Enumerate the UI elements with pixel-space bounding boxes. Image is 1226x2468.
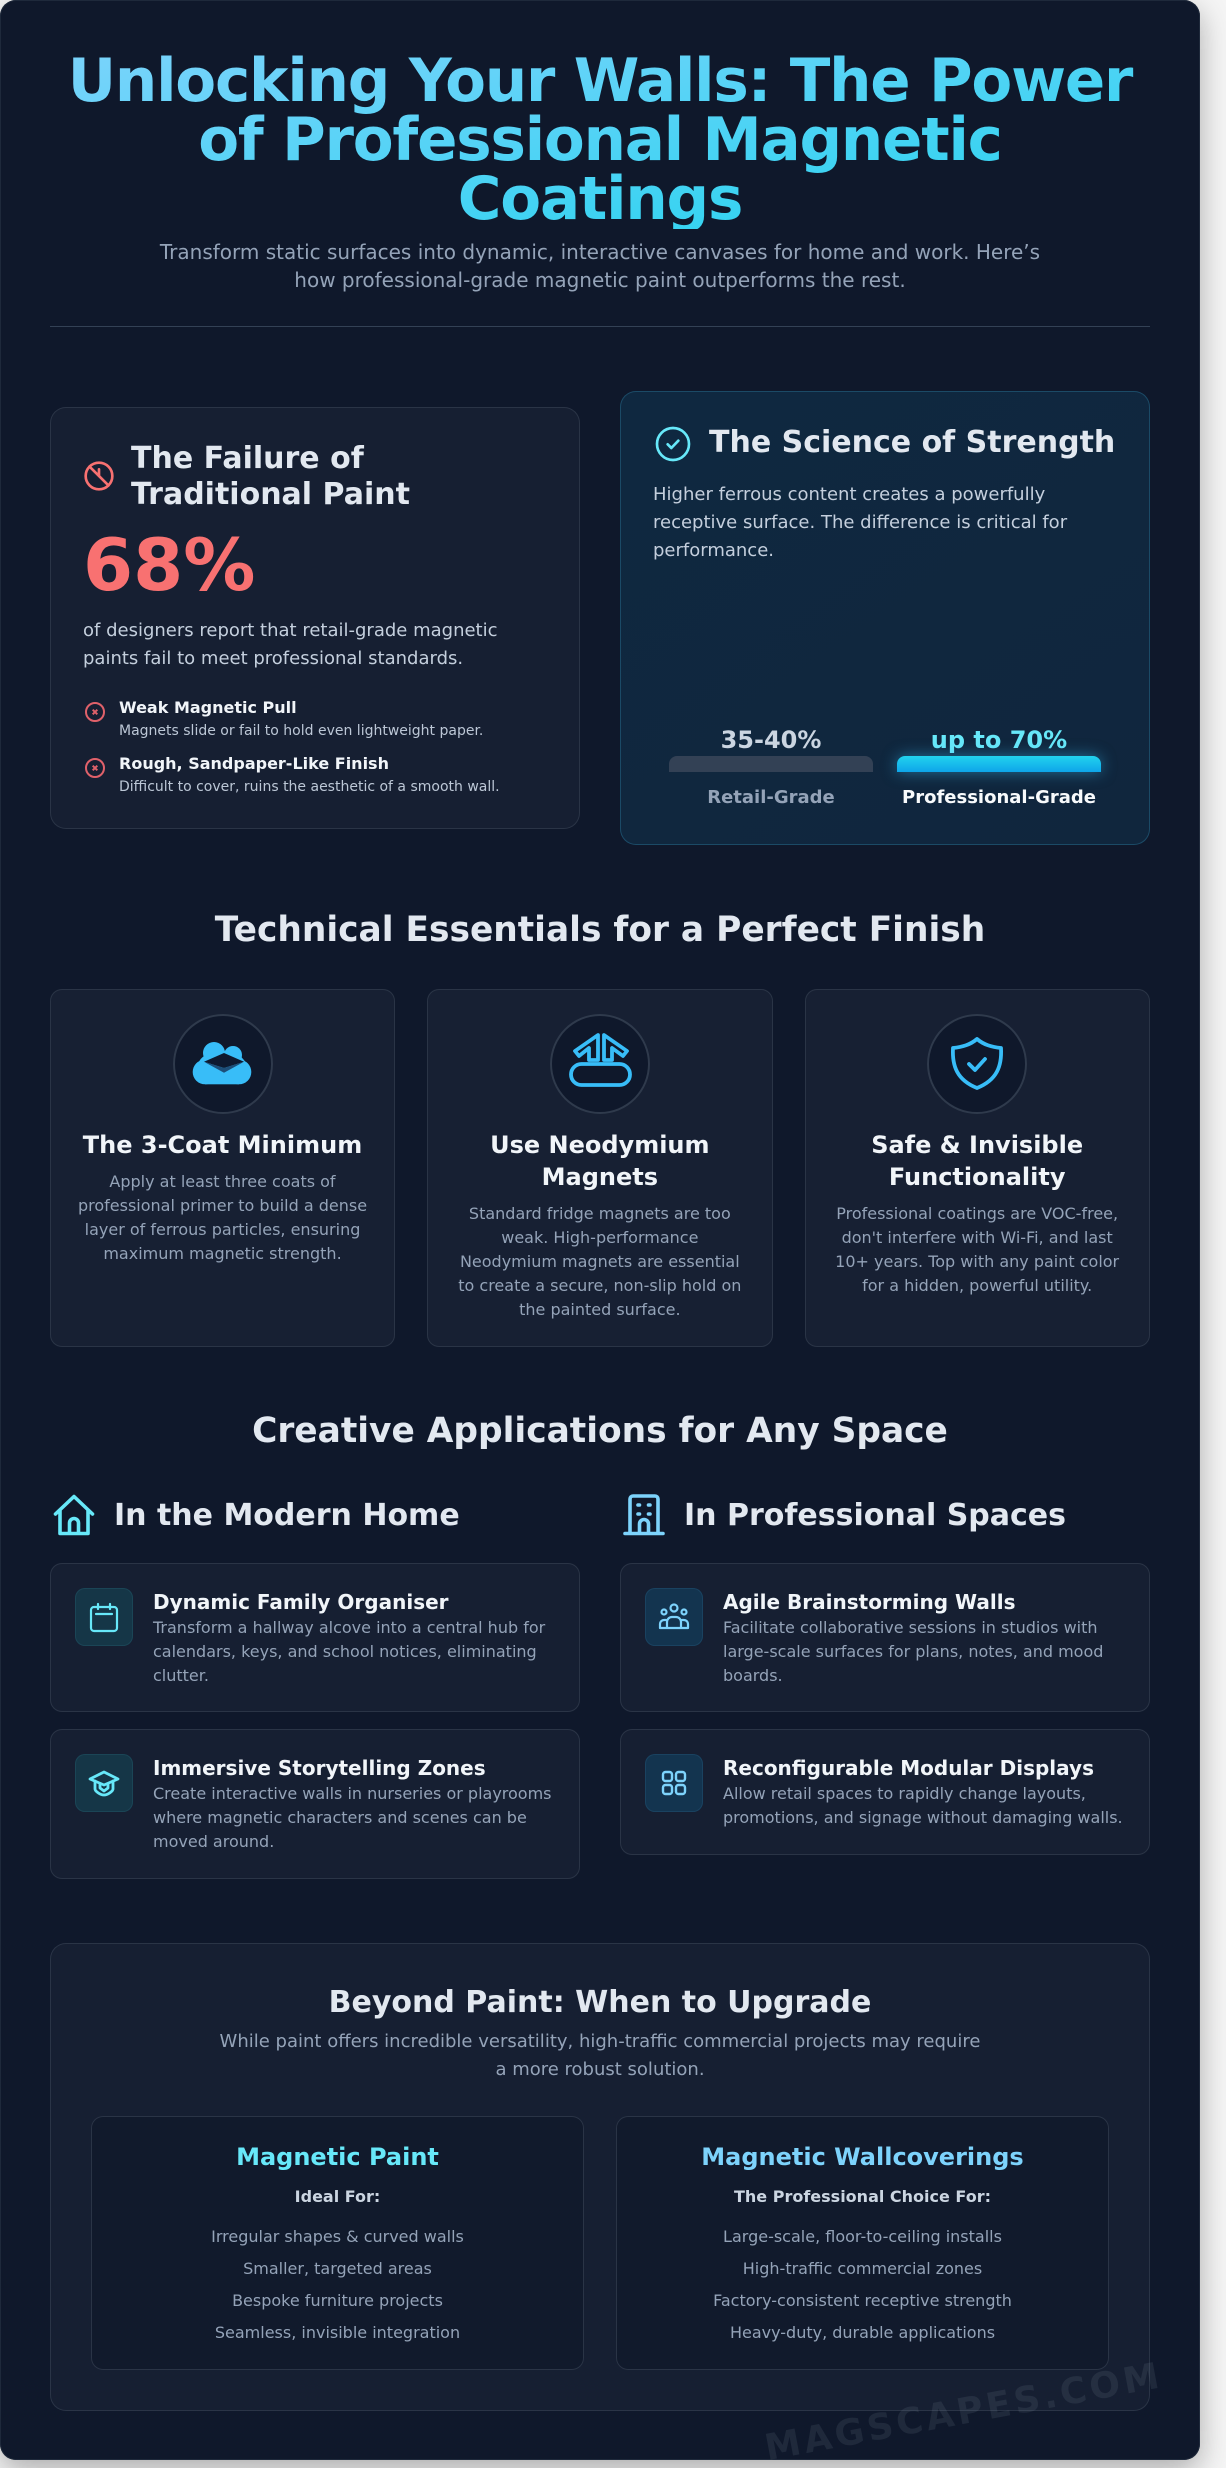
list: High-traffic commercial zones <box>743 2258 982 2278</box>
heading: Traditional Paint <box>131 477 410 512</box>
card title: The 3-Coat Minimum <box>83 1131 362 1159</box>
label: Professional-Grade <box>902 787 1096 808</box>
list: Heavy-duty, durable applications <box>730 2322 995 2342</box>
label: Retail-Grade <box>707 787 835 808</box>
panel: the science of strength <box>620 391 1150 845</box>
text: Create interactive walls in nurseries or playrooms <box>153 1784 552 1802</box>
list item: weak pull <box>85 698 483 739</box>
text: clutter. <box>153 1666 209 1684</box>
bar: professional-grade <box>889 726 1109 808</box>
big stat: 68% <box>83 523 255 607</box>
text: moved around. <box>153 1832 274 1850</box>
text: where magnetic characters and scenes can be <box>153 1808 527 1826</box>
bar <box>897 756 1101 772</box>
comparison: magnetic paint <box>91 2116 584 2370</box>
list: Irregular shapes & curved walls <box>211 2226 464 2246</box>
text: boards. <box>723 1666 783 1684</box>
icon: layered cloud <box>173 1014 273 1114</box>
item title: Rough, Sandpaper-Like Finish <box>119 754 389 773</box>
icon: building <box>623 1494 665 1536</box>
subtitle: Ideal For: <box>295 2186 380 2206</box>
icon: x circle <box>85 758 105 778</box>
title: Reconfigurable Modular Displays <box>723 1756 1094 1780</box>
icon: grid <box>645 1754 703 1812</box>
heading <box>131 441 410 512</box>
title: Coatings <box>458 164 742 234</box>
icon: house <box>54 1494 94 1536</box>
subtitle: The Professional Choice For: <box>734 2186 991 2206</box>
panel: neodymium magnets <box>427 989 773 1347</box>
icon: people <box>645 1588 703 1646</box>
list item: rough finish <box>85 754 500 795</box>
bar chart <box>669 726 1109 808</box>
panel: safe and invisible <box>805 989 1150 1347</box>
card text: Apply at least three coats of <box>109 1172 336 1190</box>
stat description: paints fail to meet professional standards. <box>83 648 463 668</box>
list: Seamless, invisible integration <box>215 2322 460 2342</box>
card text: professional primer to build a dense <box>78 1196 367 1214</box>
icon: x circle <box>85 702 105 722</box>
card text <box>458 1204 741 1318</box>
subtitle: Transform static surfaces into dynamic, interactive canvases for home and work. Here’s <box>160 240 1040 264</box>
body text: performance. <box>653 540 774 561</box>
card title: Use Neodymium <box>490 1131 710 1159</box>
bar: retail-grade <box>669 726 873 808</box>
title: Dynamic Family Organiser <box>153 1590 449 1614</box>
text <box>723 1618 1103 1684</box>
card text: 10+ years. Top with any paint color <box>835 1252 1119 1270</box>
list <box>211 2226 464 2342</box>
intro text: While paint offers incredible versatility, high-traffic commercial projects may require <box>220 2031 980 2052</box>
body text: Higher ferrous content creates a powerfully <box>653 484 1045 505</box>
card text: maximum magnetic strength. <box>103 1244 342 1262</box>
list: Bespoke furniture projects <box>232 2290 443 2310</box>
card: storytelling zones <box>50 1729 580 1879</box>
text: Allow retail spaces to rapidly change layouts, <box>723 1784 1086 1802</box>
item text: Difficult to cover, ruins the aesthetic of a smooth wall. <box>119 779 500 795</box>
heading: technical essentials: Technical Essentials for a Perfect Finish <box>215 910 985 950</box>
list: Factory-consistent receptive strength <box>713 2290 1012 2310</box>
bar <box>669 756 873 772</box>
icon: calendar <box>75 1588 133 1646</box>
icon: banned magnet <box>84 461 114 491</box>
title: Agile Brainstorming Walls <box>723 1590 1015 1614</box>
text: Facilitate collaborative sessions in studios with <box>723 1618 1098 1636</box>
body text <box>653 484 1068 561</box>
card: family organiser <box>50 1563 580 1712</box>
card title: Functionality <box>889 1163 1065 1191</box>
heading: creative applications: Creative Applications for Any Space <box>252 1411 948 1451</box>
body text: receptive surface. The difference is critical for <box>653 512 1067 533</box>
list <box>713 2226 1012 2342</box>
icon: check circle <box>656 426 690 462</box>
card text: Neodymium magnets are essential <box>460 1252 740 1270</box>
panel: 3-coat minimum <box>50 989 395 1347</box>
value: 35-40% <box>721 726 821 754</box>
card text: for a hidden, powerful utility. <box>862 1276 1092 1294</box>
list: Smaller, targeted areas <box>243 2258 432 2278</box>
text <box>152 1618 546 1684</box>
subheading: modern home <box>54 1494 460 1536</box>
title: of Professional Magnetic <box>198 106 1002 174</box>
card text: weak. High-performance <box>501 1228 698 1246</box>
title: Immersive Storytelling Zones <box>153 1756 486 1780</box>
subtitle <box>160 240 1040 292</box>
title: Magnetic Paint <box>236 2143 439 2171</box>
list: Large-scale, floor-to-ceiling installs <box>723 2226 1002 2246</box>
text <box>153 1784 552 1850</box>
text: large-scale surfaces for plans, notes, and mood <box>723 1642 1103 1660</box>
card: brainstorming walls <box>620 1563 1150 1712</box>
card title <box>871 1131 1083 1191</box>
item text: Magnets slide or fail to hold even lightweight paper. <box>119 723 483 739</box>
subtitle: how professional-grade magnetic paint outperforms the rest. <box>294 268 906 292</box>
subheading: professional spaces <box>623 1494 1066 1536</box>
icon: magnet arrows <box>550 1014 650 1114</box>
text: Transform a hallway alcove into a central hub for <box>153 1618 545 1636</box>
text <box>723 1784 1123 1826</box>
card: modular displays <box>620 1729 1150 1855</box>
intro text <box>220 2031 980 2080</box>
card text: the painted surface. <box>519 1300 681 1318</box>
icon: graduation cap <box>75 1754 133 1812</box>
panel: beyond paint <box>50 1943 1150 2411</box>
card text: Professional coatings are VOC-free, <box>836 1204 1118 1222</box>
card title: Safe & Invisible <box>871 1131 1083 1159</box>
title: Magnetic Wallcoverings <box>701 2143 1024 2171</box>
panel: the failure of traditional paint <box>50 407 580 829</box>
card text <box>78 1172 367 1262</box>
item title: Weak Magnetic Pull <box>119 698 297 717</box>
heading: In the Modern Home <box>114 1498 460 1532</box>
value: up to 70% <box>931 726 1067 754</box>
heading: The Failure of <box>131 441 364 476</box>
card text <box>835 1204 1120 1294</box>
comparison: magnetic wallcoverings <box>616 2116 1109 2370</box>
title: Unlocking Your Walls: The Power <box>68 46 1132 116</box>
intro text: a more robust solution. <box>495 2059 705 2080</box>
card text: layer of ferrous particles, ensuring <box>85 1220 360 1238</box>
title <box>0 52 1200 228</box>
card title <box>490 1131 710 1191</box>
card text: don't interfere with Wi-Fi, and last <box>842 1228 1113 1246</box>
card title: Magnets <box>542 1163 658 1191</box>
heading: Beyond Paint: When to Upgrade <box>329 1985 871 2020</box>
heading: The Science of Strength <box>709 425 1115 460</box>
card text: Standard fridge magnets are too <box>469 1204 731 1222</box>
card text: to create a secure, non-slip hold on <box>458 1276 741 1294</box>
text: calendars, keys, and school notices, eliminating <box>153 1642 537 1660</box>
text: promotions, and signage without damaging walls. <box>723 1808 1123 1826</box>
stat description: of designers report that retail-grade magnetic <box>83 620 498 640</box>
heading: In Professional Spaces <box>684 1498 1066 1532</box>
stat description <box>83 620 498 668</box>
icon: shield check <box>927 1014 1027 1114</box>
